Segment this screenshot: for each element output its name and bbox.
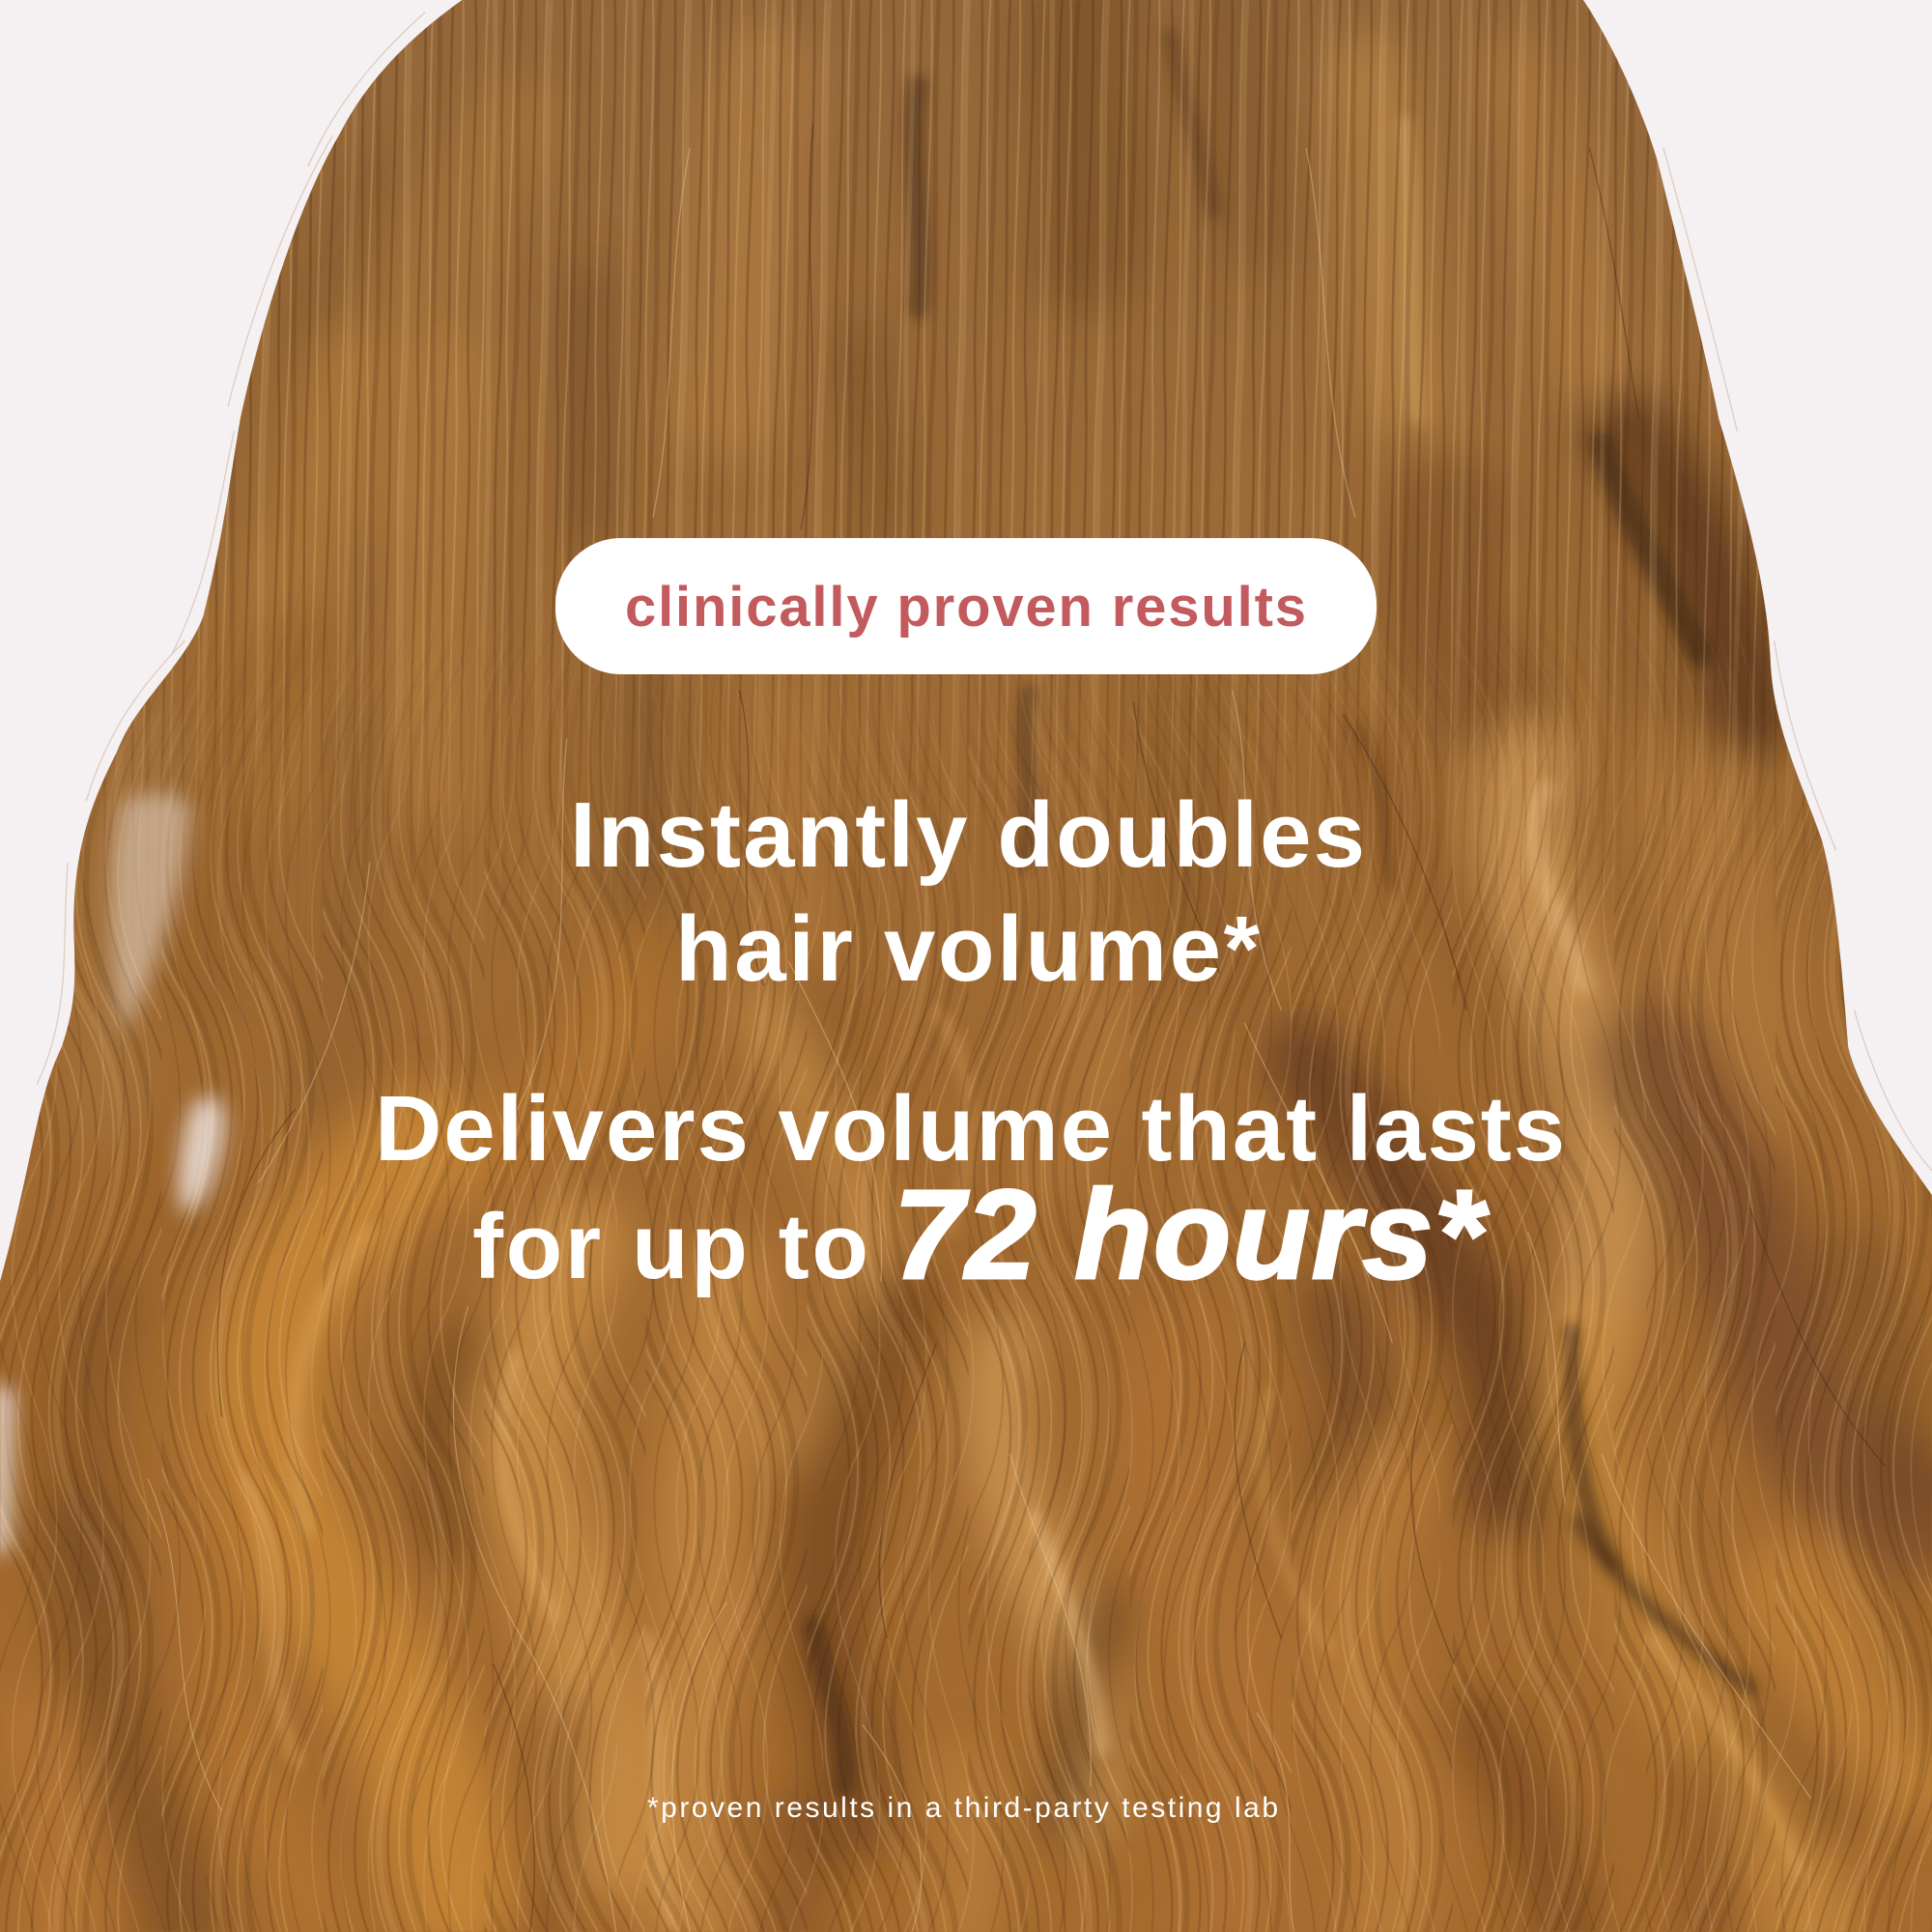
heading: delivers volume that lasts for up to 72 hours: for up to xyxy=(472,1195,868,1298)
heading: delivers volume that lasts for up to 72 hours: 72 hours* xyxy=(894,1163,1490,1305)
pill badge: clinically proven results xyxy=(555,538,1377,674)
heading: delivers volume that lasts for up to 72 hours: Delivers volume that lasts xyxy=(375,1077,1565,1180)
heading: instantly doubles hair volume: hair volume* xyxy=(675,897,1261,1001)
footnote: *proven results in a third-party testing lab xyxy=(647,1792,1278,1824)
pill badge: clinically proven results: clinically proven results xyxy=(625,576,1306,639)
heading: instantly doubles hair volume xyxy=(570,783,1365,1001)
heading: instantly doubles hair volume: Instantly doubles xyxy=(570,783,1365,887)
heading: delivers volume that lasts for up to 72 hours xyxy=(375,1077,1565,1305)
